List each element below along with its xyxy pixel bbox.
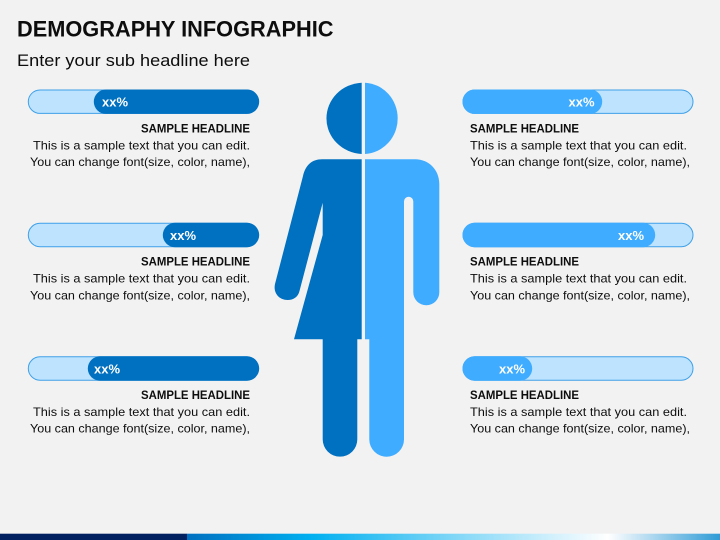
progress bar	[463, 357, 693, 380]
woman body half	[275, 159, 362, 457]
percentage: xx%	[170, 228, 196, 243]
right row 1: You can change font(size, color, name),	[470, 155, 690, 169]
man head half	[365, 83, 398, 154]
progress bar	[463, 223, 693, 247]
body text: This is a sample text that you can edit.	[33, 138, 250, 152]
percentage: xx%	[568, 94, 595, 110]
headline: SAMPLE HEADLINE	[141, 123, 250, 135]
progress bar	[28, 90, 258, 113]
body text: This is a sample text that you can edit.	[33, 272, 250, 286]
percentage: xx%	[499, 362, 525, 376]
body text: This is a sample text that you can edit.	[470, 405, 687, 419]
headline: SAMPLE HEADLINE	[470, 257, 579, 269]
percentage: xx%	[102, 94, 128, 110]
woman head half	[326, 83, 362, 154]
body text: This is a sample text that you can edit.	[33, 405, 250, 419]
headline: SAMPLE HEADLINE	[470, 390, 579, 402]
right row 3	[462, 356, 693, 436]
right row 3: You can change font(size, color, name),	[470, 422, 690, 436]
headline: SAMPLE HEADLINE	[141, 390, 250, 402]
right row 1	[462, 90, 693, 169]
left row 3	[28, 356, 259, 436]
right row 2: You can change font(size, color, name),	[470, 288, 690, 302]
progress bar	[463, 90, 693, 113]
progress bar	[28, 223, 258, 247]
progress bar	[28, 357, 258, 380]
left row 2: You can change font(size, color, name),	[30, 288, 250, 302]
left row 2	[28, 223, 259, 302]
right row 2	[462, 223, 693, 302]
subtitle: Enter your sub headline here	[17, 51, 250, 70]
body text: This is a sample text that you can edit.	[470, 272, 687, 286]
figure: half woman half man	[275, 83, 439, 457]
percentage: xx%	[618, 228, 644, 243]
body text: This is a sample text that you can edit.	[470, 138, 687, 152]
percentage: xx%	[94, 362, 120, 376]
headline: SAMPLE HEADLINE	[141, 257, 250, 269]
left row 1: You can change font(size, color, name),	[30, 155, 250, 169]
man body half	[365, 159, 439, 457]
left row 3: You can change font(size, color, name),	[30, 422, 250, 436]
footer band	[0, 534, 720, 540]
title: DEMOGRAPHY INFOGRAPHIC	[17, 16, 334, 42]
left row 1	[28, 90, 259, 169]
headline: SAMPLE HEADLINE	[470, 123, 579, 135]
